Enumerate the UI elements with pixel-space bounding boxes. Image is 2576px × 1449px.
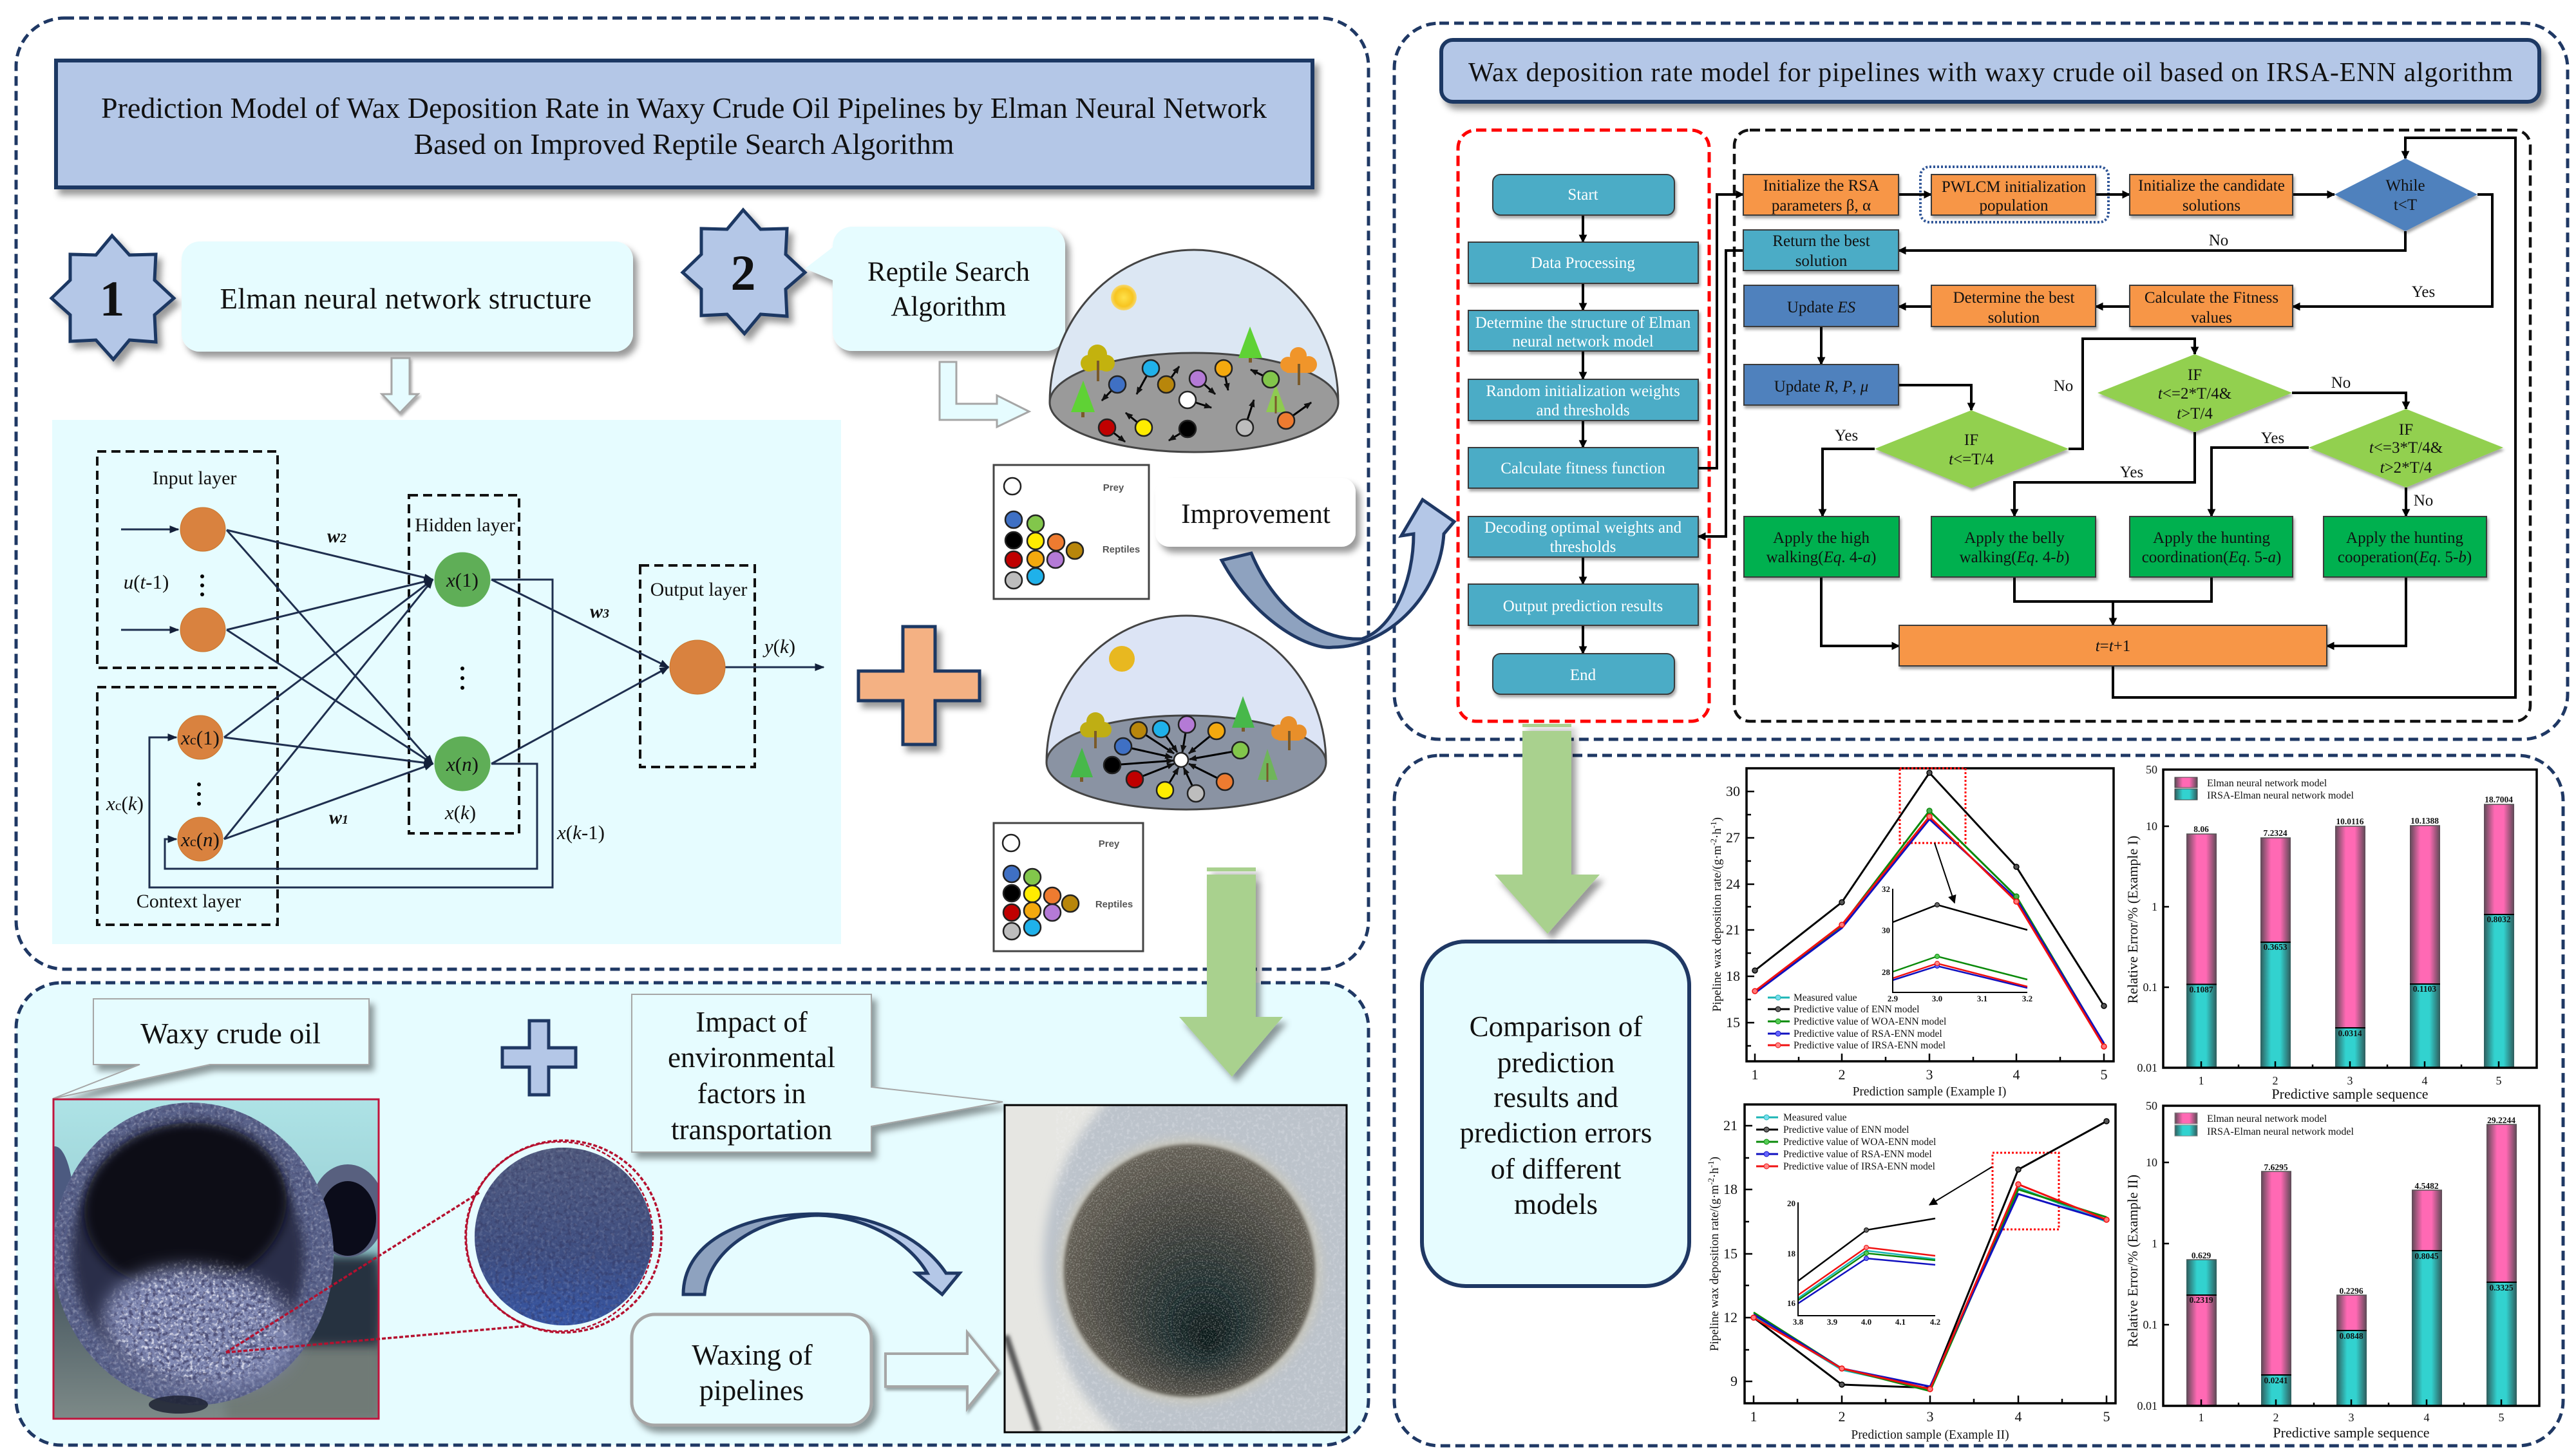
chart: prediction sample example II: 4 — [2014, 1408, 2022, 1425]
chart: relative error example I: Predictive sample sequence — [2271, 1086, 2429, 1102]
chart: relative error example I: 1 — [2199, 1074, 2204, 1087]
chart: relative error example I: 10.1388 — [2410, 816, 2439, 826]
flowchart: improved reptile search process: Yes — [1835, 427, 1858, 444]
chart: prediction sample example II: 18 — [1723, 1181, 1738, 1197]
pointer: magnification lines — [226, 1193, 526, 1352]
label: Waxing of pipelines: pipelines — [699, 1374, 804, 1406]
flowchart: improved reptile search process: While — [2385, 177, 2425, 194]
chart: prediction sample example II: 12 — [1723, 1309, 1738, 1325]
label: comparison of prediction results: Comparison of — [1470, 1010, 1642, 1043]
chart: relative error example II: 0.1 — [2143, 1318, 2157, 1331]
legend: example I error — [2175, 777, 2354, 801]
chart: prediction sample example I: Pipeline wax deposition rate/(g·m — [1710, 846, 1724, 1012]
heading: Elman neural network structure: Elman neural network structure — [220, 283, 591, 315]
chart: relative error example II: 0.0848 — [2339, 1331, 2363, 1341]
diagram: Elman neural network — [52, 420, 841, 944]
inset chart: zoom around sample 4: 4.0 — [1861, 1317, 1871, 1327]
chart: relative error example I: 0.1087 — [2189, 985, 2213, 994]
chart: relative error example II: 1 — [2199, 1411, 2204, 1424]
flowchart: improved reptile search process: cooperation(Eq. 5-b) — [2338, 549, 2472, 566]
chart: prediction sample example II: 5 — [2103, 1408, 2110, 1425]
chart: relative error example I: 7.2324 — [2263, 828, 2287, 838]
heading: Elman neural network structure — [182, 242, 633, 352]
legend: example II series: Predictive value of IRSA-ENN model — [1783, 1161, 1935, 1172]
chart: prediction sample example I: -1 — [1709, 821, 1718, 828]
flowchart: improved reptile search process: values — [2191, 309, 2232, 327]
callout: Impact of environmental factors — [632, 994, 1003, 1152]
heading: Reptile Search Algorithm — [805, 227, 1065, 351]
chart: relative error example II: 0.01 — [2137, 1399, 2157, 1412]
panel: IRSA-ENN model flowchart — [1394, 23, 2568, 739]
chart: prediction sample example I: 2 — [1838, 1066, 1846, 1083]
legend: example II series: Measured value — [1783, 1112, 1847, 1123]
flowchart: Elman network process: Output prediction results — [1503, 598, 1663, 615]
arrow: waxing to pipeline photo — [886, 1332, 998, 1408]
flowchart: improved reptile search process: t=t+1 — [2096, 638, 2130, 655]
flowchart: improved reptile search process: parameters β, α — [1772, 197, 1871, 214]
inset chart: zoom around sample 4: 16 — [1787, 1298, 1795, 1308]
arrow: green down to comparison — [1495, 724, 1600, 934]
photo: waxy pipe opening — [35, 1089, 385, 1420]
chart: relative error example II: 29.2244 — [2487, 1115, 2515, 1125]
diagram: Elman neural network: y(k) — [762, 635, 795, 658]
chart: relative error example I: Relative Error/% (Example I) — [2125, 836, 2141, 1003]
flowchart: improved reptile search process: Apply the belly — [1964, 529, 2065, 547]
legend: example I series: Predictive value of WOA-ENN model — [1794, 1016, 1946, 1027]
chart: prediction sample example I: 15 — [1726, 1014, 1740, 1030]
heading: wax deposition rate model: Wax deposition rate model for pipelines with waxy crude oil based on IRSA-ENN algorithm — [1468, 58, 2513, 88]
chart: relative error example I: 10 — [2146, 820, 2157, 833]
flowchart: improved reptile search process: t<T — [2394, 196, 2417, 214]
chart: prediction sample example I: 24 — [1726, 876, 1740, 892]
flowchart: improved reptile search process: Apply the high — [1773, 529, 1870, 547]
flowchart: improved reptile search process: IF — [2188, 366, 2202, 384]
label: Waxing of pipelines: Waxing of — [692, 1339, 813, 1371]
flowchart: Elman network process: Random initialization weights — [1486, 383, 1680, 400]
callout: Waxy crude oil: Waxy crude oil — [140, 1017, 321, 1050]
chart: prediction sample example I: Prediction sample (Example I) — [1853, 1085, 2006, 1099]
illustration: reptile exploration dome — [1050, 250, 1338, 452]
badge: number 2 — [683, 210, 805, 334]
flowchart: improved reptile search process: t<=3*T/4& — [2369, 439, 2443, 457]
diagram: Elman neural network: u(t-1) — [124, 571, 169, 593]
inset chart: zoom around sample 3: 3.0 — [1932, 994, 1942, 1003]
flowchart: improved reptile search process: Yes — [2261, 430, 2284, 447]
inset chart: zoom around sample 3: 3.2 — [2022, 994, 2032, 1003]
inset chart: zoom around sample 4: 3.9 — [1827, 1317, 1838, 1327]
chart: relative error example I: 1 — [2152, 900, 2157, 913]
flowchart: improved reptile search process: Yes — [2120, 464, 2143, 481]
flowchart: improved reptile search process: walking(Eq. 4-b) — [1960, 549, 2069, 566]
flowchart: improved reptile search process: Initialize the candidate — [2138, 177, 2285, 194]
flowchart: improved reptile search process: t<=2*T/4& — [2158, 385, 2231, 402]
flowchart: improved reptile search process: Update R, P, μ — [1774, 378, 1868, 395]
label: comparison of prediction results: prediction errors — [1460, 1117, 1652, 1149]
legend: example I series — [1768, 992, 1946, 1051]
chart: relative error example I: 10.0116 — [2336, 817, 2364, 826]
legend: prey and reptiles, bottom: Prey — [1099, 838, 1120, 849]
plus sign: blue — [502, 1021, 576, 1095]
legend: prey and reptiles, bottom — [994, 823, 1143, 951]
legend: example II error — [2175, 1113, 2354, 1137]
diagram: Elman neural network: w1 — [329, 807, 348, 828]
flowchart: improved reptile search process: No — [2331, 374, 2351, 392]
chart: relative error example I: 2 — [2272, 1074, 2278, 1087]
inset chart: zoom around sample 4: 18 — [1787, 1249, 1795, 1258]
legend: example II series: Predictive value of WOA-ENN model — [1783, 1137, 1936, 1148]
flowchart: improved reptile search process: No — [2414, 492, 2433, 509]
arrow: green down to pipeline photo — [1179, 867, 1283, 1077]
chart: prediction sample example II: -1 — [1706, 1160, 1716, 1168]
legend: example II series — [1756, 1112, 1936, 1172]
diagram: Elman neural network: Output layer — [650, 579, 747, 600]
flowchart: Elman network process: End — [1570, 667, 1596, 684]
flowchart: Elman network process: Data Processing — [1531, 254, 1635, 272]
chart: relative error example II: 0.2296 — [2339, 1286, 2363, 1296]
chart: prediction sample example I: 1 — [1752, 1066, 1758, 1083]
flowchart: Elman network process: thresholds — [1550, 538, 1616, 556]
chart: prediction sample example I: 5 — [2101, 1066, 2107, 1083]
flowchart: improved reptile search process: Update ES — [1787, 299, 1856, 316]
flowchart: Elman network process: Start — [1567, 186, 1598, 204]
label: Waxing of pipelines — [632, 1314, 871, 1425]
flowchart: improved reptile search process: coordination(Eq. 5-a) — [2142, 549, 2281, 566]
chart: relative error example I: 5 — [2496, 1074, 2501, 1087]
chart: prediction sample example I: 27 — [1726, 829, 1740, 846]
chart: relative error example I: 3 — [2347, 1074, 2353, 1087]
chart: prediction sample example II: ) — [1708, 1157, 1721, 1160]
chart: relative error example II: 4.5482 — [2414, 1181, 2439, 1191]
chart: prediction sample example II: 15 — [1723, 1245, 1738, 1262]
label: comparison of prediction results: of different — [1491, 1153, 1622, 1185]
chart: relative error example I: 0.1 — [2143, 981, 2157, 994]
inset: magnified wax surface — [466, 1141, 661, 1332]
label: comparison of prediction results — [1422, 942, 1689, 1286]
inset chart: zoom around sample 3: 3.1 — [1977, 994, 1987, 1003]
flowchart: improved reptile search process: solution — [1795, 252, 1848, 270]
callout: Impact of environmental factors: factors in — [697, 1077, 806, 1110]
chart: relative error example II: 5 — [2499, 1411, 2504, 1424]
chart: prediction sample example I: -2 — [1709, 838, 1718, 846]
arrow: algorithm to exploration dome — [940, 362, 1029, 427]
legend: example I series: Predictive value of IRSA-ENN model — [1794, 1040, 1946, 1051]
inset chart: zoom around sample 4: 4.2 — [1930, 1317, 1940, 1327]
chart: relative error example I — [2125, 763, 2537, 1102]
inset chart: zoom around sample 3: 32 — [1882, 884, 1890, 894]
legend: prey and reptiles, bottom: Reptiles — [1095, 899, 1133, 910]
flowchart: improved reptile search process: PWLCM initialization — [1942, 178, 2087, 196]
chart: relative error example I: 4 — [2421, 1074, 2428, 1087]
flowchart: improved reptile search process: IF — [2399, 421, 2413, 439]
flowchart: improved reptile search process — [1698, 130, 2530, 721]
flowchart: improved reptile search process: solution — [1988, 309, 2040, 327]
chart: relative error example I: 0.0314 — [2338, 1028, 2362, 1038]
diagram: Elman neural network: xc(1) — [180, 726, 220, 749]
inset chart: zoom around sample 3: 28 — [1882, 967, 1891, 977]
flowchart: improved reptile search process: Apply the hunting — [2346, 529, 2463, 547]
legend: example I error: Elman neural network model — [2207, 778, 2327, 789]
arrow: curved to pipeline photo — [683, 1214, 960, 1294]
panel: waxy crude oil and pipelines — [16, 983, 1443, 1449]
diagram: Elman neural network: x(k) — [444, 801, 476, 824]
chart: prediction sample example II: ·h — [1708, 1168, 1721, 1178]
chart: prediction sample example I: ·h — [1710, 828, 1724, 838]
flowchart: improved reptile search process: Determine the best — [1953, 289, 2074, 307]
flowchart: Elman network process: Decoding optimal weights and — [1484, 519, 1682, 536]
flowchart: improved reptile search process: Apply the hunting — [2153, 529, 2270, 547]
legend: prey and reptiles, top: Prey — [1103, 482, 1124, 493]
diagram: Elman neural network: Input layer — [153, 468, 236, 489]
heading: wax deposition rate model — [1441, 40, 2539, 102]
heading: Reptile Search Algorithm: Reptile Search — [867, 257, 1030, 287]
legend: example II series: Predictive value of ENN model — [1783, 1124, 1909, 1135]
chart: prediction sample example II: Prediction sample (Example II) — [1851, 1428, 2009, 1442]
chart: relative error example I: 0.01 — [2137, 1061, 2157, 1074]
chart: relative error example I: 0.3653 — [2263, 942, 2287, 952]
legend: example II error: Elman neural network model — [2207, 1113, 2327, 1124]
chart: relative error example II: 10 — [2146, 1156, 2157, 1169]
diagram: Elman neural network: Hidden layer — [415, 515, 515, 536]
chart: prediction sample example II: 9 — [1730, 1373, 1738, 1389]
callout: Impact of environmental factors: environmental — [668, 1041, 835, 1074]
flowchart: improved reptile search process: Initialize the RSA — [1763, 177, 1879, 194]
chart: relative error example II: 1 — [2152, 1237, 2157, 1250]
chart: prediction sample example II: 21 — [1723, 1117, 1738, 1133]
flowchart: improved reptile search process: Return the best — [1772, 232, 1870, 250]
chart: prediction sample example II: Pipeline wax deposition rate/(g·m — [1708, 1185, 1721, 1351]
chart: relative error example II: 3 — [2348, 1411, 2354, 1424]
chart: prediction sample example II: 3 — [1927, 1408, 1933, 1425]
legend: example I series: Measured value — [1794, 992, 1857, 1003]
flowchart: Elman network process: neural network model — [1512, 333, 1654, 350]
diagram: Elman neural network: x(n) — [446, 753, 478, 775]
flowchart: improved reptile search process: walking(Eq. 4-a) — [1766, 549, 1876, 566]
diagram: Elman neural network: x(1) — [446, 569, 478, 591]
chart: relative error example II: 2 — [2273, 1411, 2278, 1424]
callout: Impact of environmental factors: Impact of — [696, 1006, 808, 1038]
label: comparison of prediction results: prediction — [1497, 1046, 1615, 1079]
flowchart: improved reptile search process: t>2*T/4 — [2380, 459, 2432, 477]
inset chart: zoom around sample 3: 30 — [1882, 925, 1890, 935]
legend: example I error: IRSA-Elman neural network model — [2207, 790, 2354, 801]
title banner: Prediction Model of Wax Deposition Rate in Waxy Crude Oil Pipelines by Elman Neural Network — [101, 91, 1267, 124]
flowchart: improved reptile search process: population — [1980, 197, 2049, 214]
chart: relative error example II: 7.6295 — [2264, 1162, 2288, 1172]
flowchart: Elman network process: Determine the structure of Elman — [1475, 314, 1691, 332]
chart: relative error example II: Relative Error/% (Example II) — [2125, 1175, 2141, 1347]
chart: relative error example II: 0.629 — [2192, 1251, 2211, 1260]
callout: Impact of environmental factors: transportation — [671, 1113, 832, 1146]
panel: comparison of prediction results — [1394, 755, 2563, 1446]
flowchart: improved reptile search process: t>T/4 — [2177, 405, 2213, 422]
chart: relative error example I: 8.06 — [2193, 824, 2209, 834]
illustration: reptile encircling dome — [1046, 616, 1326, 810]
legend: prey and reptiles, top — [994, 465, 1149, 599]
flowchart: improved reptile search process: No — [2209, 232, 2228, 249]
chart: prediction sample example II — [1706, 1104, 2116, 1442]
inset chart: zoom around sample 3 — [1882, 884, 2032, 1003]
flowchart: Elman network process — [1458, 130, 1709, 721]
chart: prediction sample example I: 30 — [1726, 783, 1740, 799]
flowchart: improved reptile search process: Yes — [2412, 283, 2435, 301]
chart: prediction sample example I — [1709, 768, 2114, 1099]
label: Improvement: Improvement — [1181, 499, 1331, 529]
badge: number 1 — [52, 236, 174, 359]
chart: prediction sample example II: -2 — [1706, 1178, 1716, 1185]
flowchart: improved reptile search process: t<=T/4 — [1949, 451, 1994, 468]
chart: prediction sample example I: 4 — [2013, 1066, 2020, 1083]
legend: example I series: Predictive value of ENN model — [1794, 1004, 1919, 1015]
chart: relative error example II: 0.2319 — [2189, 1295, 2213, 1305]
label: Improvement — [1155, 478, 1356, 547]
chart: prediction sample example II: 2 — [1838, 1408, 1846, 1425]
chart: relative error example II: 50 — [2146, 1099, 2157, 1112]
chart: prediction sample example II: 1 — [1750, 1408, 1757, 1425]
inset chart: zoom around sample 4 — [1787, 1198, 1940, 1327]
diagram: Elman neural network: x(k-1) — [556, 821, 605, 844]
diagram: Elman neural network: w2 — [327, 526, 346, 547]
flowchart: improved reptile search process: solutions — [2183, 197, 2240, 214]
badge: number 1: 1 — [99, 270, 125, 327]
chart: relative error example I: 18.7004 — [2485, 795, 2513, 804]
inset chart: zoom around sample 4: 3.8 — [1793, 1317, 1804, 1327]
chart: relative error example II: 0.0241 — [2264, 1376, 2288, 1385]
chart: relative error example II: 4 — [2424, 1411, 2429, 1424]
plus sign: orange — [858, 627, 980, 744]
arrow: down to network diagram — [382, 358, 418, 413]
chart: relative error example I: 0.8032 — [2486, 914, 2511, 924]
flowchart: Elman network process: Calculate fitness function — [1501, 460, 1665, 477]
title banner: Based on Improved Reptile Search Algorithm — [413, 128, 954, 160]
chart: prediction sample example I: 21 — [1726, 922, 1740, 938]
legend: example I series: Predictive value of RSA-ENN model — [1794, 1028, 1942, 1039]
flowchart: improved reptile search process: IF — [1964, 431, 1978, 449]
chart: relative error example I: 50 — [2146, 763, 2157, 776]
chart: prediction sample example I: 3 — [1926, 1066, 1933, 1083]
chart: relative error example II: 0.3325 — [2489, 1283, 2514, 1293]
chart: relative error example II: 0.8045 — [2414, 1251, 2439, 1261]
chart: prediction sample example I: ) — [1710, 817, 1724, 821]
heading: Reptile Search Algorithm: Algorithm — [891, 292, 1007, 322]
photo: waxed pipeline interior — [1003, 1104, 1347, 1434]
nodes — [178, 507, 725, 861]
legend: example II error: IRSA-Elman neural network model — [2207, 1126, 2354, 1137]
panel: Elman network and reptile search — [16, 18, 1368, 969]
legend: prey and reptiles, top: Reptiles — [1103, 544, 1140, 555]
chart: relative error example II: Predictive sample sequence — [2273, 1425, 2430, 1441]
diagram: Elman neural network: w3 — [590, 601, 609, 622]
chart: relative error example I: 0.1103 — [2413, 984, 2436, 994]
diagram: Elman neural network: xc(k) — [106, 792, 144, 815]
label: comparison of prediction results: results and — [1493, 1081, 1618, 1113]
chart: prediction sample example I: 18 — [1726, 968, 1740, 984]
diagram: Elman neural network: xc(n) — [180, 828, 220, 851]
inset chart: zoom around sample 4: 20 — [1787, 1198, 1795, 1208]
diagram: Elman neural network: Context layer — [137, 891, 241, 912]
flowchart: improved reptile search process: No — [2054, 377, 2073, 395]
inset chart: zoom around sample 3: 2.9 — [1888, 994, 1899, 1003]
label: comparison of prediction results: models — [1514, 1188, 1598, 1220]
arrow: improvement curve to flowchart — [1222, 500, 1454, 647]
title banner — [56, 61, 1312, 187]
flowchart: Elman network process: and thresholds — [1536, 402, 1630, 419]
inset chart: zoom around sample 4: 4.1 — [1895, 1317, 1906, 1327]
callout: Waxy crude oil — [53, 999, 369, 1099]
legend: example II series: Predictive value of RSA-ENN model — [1783, 1149, 1932, 1160]
badge: number 2: 2 — [730, 245, 756, 301]
flowchart: improved reptile search process: Calculate the Fitness — [2145, 289, 2278, 307]
chart: relative error example II — [2125, 1099, 2539, 1441]
